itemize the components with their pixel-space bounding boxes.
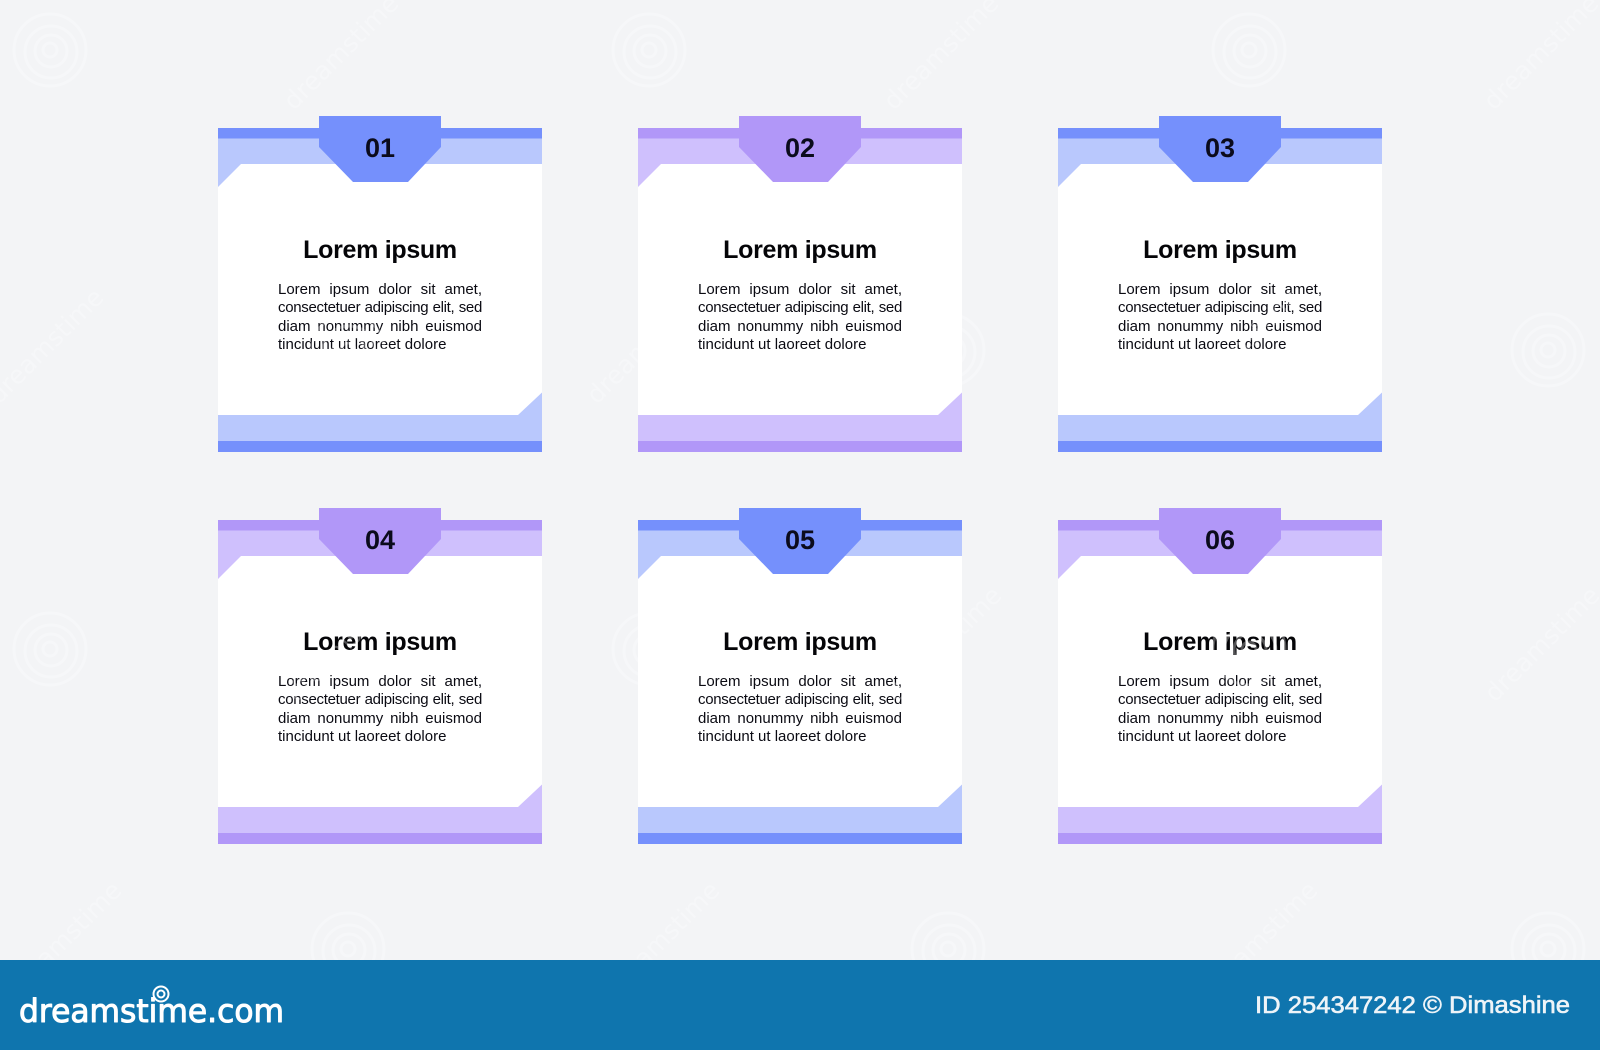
heading: Lorem ipsum xyxy=(303,628,457,656)
text block: diam nonummy nibh euismod xyxy=(278,318,482,335)
watermark overlay: dreamstime xyxy=(1197,876,1323,1002)
watermark overlay: dreamstime xyxy=(1179,283,1305,409)
number 05: 05 xyxy=(785,525,815,555)
footer logo text: dreamstime.com xyxy=(19,992,284,1030)
heading: Lorem ipsum xyxy=(1143,236,1297,264)
text block: consectetuer adipiscing elit, sed xyxy=(1118,691,1322,708)
heading: Lorem ipsum xyxy=(723,236,877,264)
number 01: 01 xyxy=(365,133,395,163)
panel: card 02 xyxy=(638,116,962,452)
text block: diam nonummy nibh euismod xyxy=(1118,710,1322,727)
watermark overlay: dreamstime xyxy=(881,581,1007,707)
text block: tincidunt ut laoreet dolore xyxy=(1118,728,1286,745)
text block: tincidunt ut laoreet dolore xyxy=(278,336,446,353)
icon: card 01 frame xyxy=(218,116,542,452)
text block: diam nonummy nibh euismod xyxy=(698,710,902,727)
text block xyxy=(1118,281,1322,353)
icon: card 02 frame xyxy=(638,116,962,452)
text block: tincidunt ut laoreet dolore xyxy=(698,336,866,353)
text block: diam nonummy nibh euismod xyxy=(1118,318,1322,335)
text block: consectetuer adipiscing elit, sed xyxy=(278,299,482,316)
text block: Lorem ipsum dolor sit amet, xyxy=(1118,281,1322,298)
footer bar xyxy=(0,960,1600,1050)
number 03: 03 xyxy=(1205,133,1235,163)
text block: consectetuer adipiscing elit, sed xyxy=(698,691,902,708)
text block: Lorem ipsum dolor sit amet, xyxy=(698,673,902,690)
image id and author: ID 254347242 © Dimashine xyxy=(1255,992,1570,1019)
panel: card 05 xyxy=(638,508,962,844)
heading: Lorem ipsum xyxy=(723,628,877,656)
text block: consectetuer adipiscing elit, sed xyxy=(698,299,902,316)
text block xyxy=(278,281,482,353)
text block: tincidunt ut laoreet dolore xyxy=(1118,336,1286,353)
panel: card 03 xyxy=(1058,116,1382,452)
panel: card 01 xyxy=(218,116,542,452)
panel: card 04 xyxy=(218,508,542,844)
text block xyxy=(698,673,902,745)
number 04: 04 xyxy=(365,525,395,555)
text block: consectetuer adipiscing elit, sed xyxy=(1118,299,1322,316)
text block: Lorem ipsum dolor sit amet, xyxy=(278,673,482,690)
icon: card 05 frame xyxy=(638,508,962,844)
text block: tincidunt ut laoreet dolore xyxy=(698,728,866,745)
watermark overlay: dreamstime xyxy=(599,876,725,1002)
watermark overlay: dreamstime xyxy=(281,581,407,707)
text block xyxy=(698,281,902,353)
text block: Lorem ipsum dolor sit amet, xyxy=(698,281,902,298)
icon: card 06 frame xyxy=(1058,508,1382,844)
heading: Lorem ipsum xyxy=(303,236,457,264)
text block xyxy=(1118,673,1322,745)
text block: Lorem ipsum dolor sit amet, xyxy=(1118,673,1322,690)
text block: Lorem ipsum dolor sit amet, xyxy=(278,281,482,298)
text block: diam nonummy nibh euismod xyxy=(278,710,482,727)
icon: card 04 frame xyxy=(218,508,542,844)
watermark overlay: dreamstime xyxy=(1,876,127,1002)
icon: card 03 frame xyxy=(1058,116,1382,452)
panel: card 06 xyxy=(1058,508,1382,844)
text block: diam nonummy nibh euismod xyxy=(698,318,902,335)
heading: Lorem ipsum xyxy=(1143,628,1297,656)
number 02: 02 xyxy=(785,133,815,163)
text block: consectetuer adipiscing elit, sed xyxy=(278,691,482,708)
icon: logo spiral xyxy=(154,986,168,1002)
text block: tincidunt ut laoreet dolore xyxy=(278,728,446,745)
text block xyxy=(278,673,482,745)
watermark overlay: dreamstime xyxy=(581,283,707,409)
number 06: 06 xyxy=(1205,525,1235,555)
